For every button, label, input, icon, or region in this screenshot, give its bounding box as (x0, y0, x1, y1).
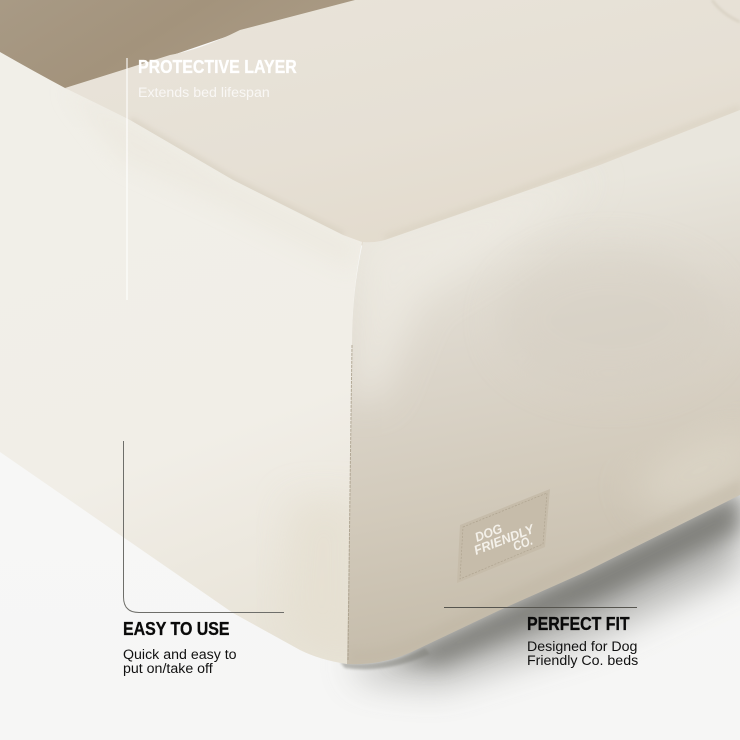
heading: perfect fit: PERFECT FIT (527, 614, 630, 634)
left bolster top face shading (65, 88, 362, 270)
floor shadow: corner contact (340, 648, 430, 669)
left bolster shade near corner (296, 508, 348, 592)
floor shadow: soft (350, 495, 740, 685)
callout: easy to use (123, 619, 237, 677)
floor shadow: contact (390, 490, 740, 665)
cushion shade near right bolster (385, 108, 740, 238)
perfect fit leader line (444, 606, 637, 608)
back wall of bed (0, 0, 360, 90)
left bolster (0, 52, 362, 664)
text: designed for: Designed for Dog (527, 639, 637, 655)
heading: easy to use: EASY TO USE (123, 619, 230, 639)
text: extends bed lifespan: Extends bed lifespan (138, 85, 270, 101)
inner cushion (65, 0, 740, 250)
right bolster top highlight (352, 243, 454, 392)
easy to use leader line (124, 441, 284, 612)
protective layer leader line (126, 58, 128, 300)
label brand text: DOG (473, 521, 504, 545)
text: designed for: Friendly Co. beds (527, 653, 638, 669)
right bolster (340, 100, 740, 680)
text: quick and easy: put on/take off (123, 661, 213, 677)
text: designed for (527, 639, 638, 669)
corner seam (348, 345, 352, 660)
cushion tuft seam (712, 0, 740, 22)
label brand text: FRIENDLY (472, 521, 537, 558)
cushion crease along left bolster (130, 120, 343, 235)
right bolster lower right reflection (654, 447, 740, 501)
callout: perfect fit (527, 614, 638, 669)
label brand text: CO. (511, 533, 535, 554)
text: quick and easy (123, 647, 237, 677)
text: quick and easy: Quick and easy to (123, 647, 237, 663)
right bolster mid shade (500, 250, 720, 390)
heading: protective layer: PROTECTIVE LAYER (138, 57, 297, 77)
fabric label (457, 489, 550, 583)
bottom edge shade (692, 488, 736, 510)
callout: protective layer (138, 57, 297, 101)
